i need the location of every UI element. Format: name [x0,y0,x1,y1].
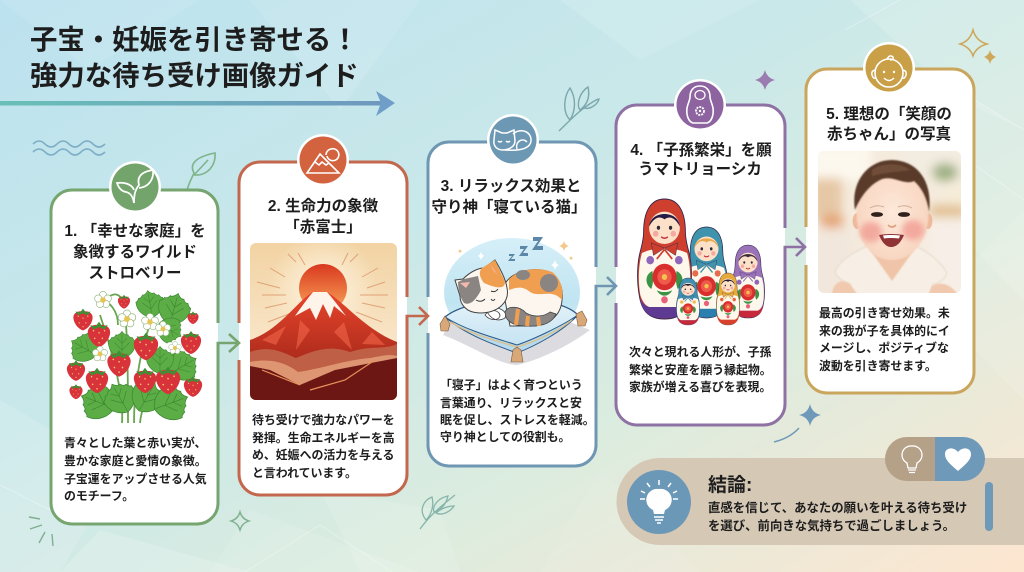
body text [64,436,207,503]
heading: 守り神「寝ている猫」 [431,197,587,216]
body text: 言葉通り、リラックスと安 [440,396,582,410]
body text [440,378,595,444]
body text: 眠を促し、ストレスを軽減。 [440,413,595,427]
icon pill: bulb and heart [885,437,985,481]
body text [819,306,950,373]
icon: doll [674,79,726,131]
body text: 青々とした葉と赤い実が、 [64,436,206,450]
body text [252,413,395,480]
icon: baby face [863,42,915,94]
arrow: title timeline [0,91,395,116]
panel: card 1 wild strawberry [51,161,218,524]
body text [708,500,967,533]
body text: め、妊娠への活力を与える [252,448,394,462]
panel: conclusion [616,458,1024,545]
heading: 3. リラックス効果と [441,177,581,195]
title [30,24,359,91]
body text: と言われています。 [252,466,357,480]
body text: 発揮。生命エネルギーを高 [252,431,395,445]
panel: card 4 matryoshka [616,79,785,425]
body text: 繁栄と安産を願う縁起物。 [629,363,772,377]
body text: 豊かな家庭と愛情の象徴。 [64,454,207,468]
photo: baby [818,151,961,293]
heading [268,196,379,236]
arrow: 4 to 5 [784,238,805,256]
title: 強力な待ち受け画像ガイド [30,60,359,91]
illustration: Fuji [250,233,397,400]
heading: 「赤富士」 [284,218,362,236]
illustration: strawberries [64,288,204,426]
heading [826,105,952,143]
heading: ストロベリー [88,265,182,282]
heading: 1. 「幸せな家庭」を [64,221,206,240]
body text: 「寝子」はよく育つという [440,378,583,392]
arrow: 2 to 3 [406,307,428,325]
panel: card 5 smiling baby [806,42,974,393]
arrow: 3 to 4 [594,277,616,295]
heading: 象徴するワイルド [73,242,197,261]
icon: sprout [109,161,161,213]
decoration: leaves branch [559,87,599,131]
body text: を選び、前向きな気持ちで過ごしましょう。 [708,518,955,533]
icon: light bulb [627,470,691,534]
heading [64,221,206,282]
panel: card 2 red Fuji [239,134,407,495]
body text: 最高の引き寄せ効果。未 [819,306,950,320]
body text [629,345,772,394]
heading: 結論: [708,474,752,496]
heading: 赤ちゃん」の写真 [827,125,951,143]
body text: メージし、ポジティブな [819,341,949,355]
heading [431,177,587,216]
heading: 5. 理想の「笑顔の [826,105,952,123]
body text: 波動を引き寄せます。 [819,359,937,373]
body text: 来の我が子を具体的にイ [819,324,950,338]
arrow: 1 to 2 [216,334,239,352]
body text: のモチーフ。 [64,489,134,503]
body text: 直感を信じて、あなたの願いを叶える待ち受け [708,500,967,515]
heading: 4. 「子孫繁栄」を願 [630,140,772,159]
body text: 家族が増える喜びを表現。 [629,380,771,394]
heading: 2. 生命力の象徴 [268,196,379,215]
accent bar [985,482,993,531]
illustration: cat [440,237,590,365]
body text: 待ち受けで強力なパワーを [252,413,395,427]
icon: cat [487,114,539,166]
decoration: waves [33,141,105,155]
body text: 子宝運をアップさせる人気 [64,472,207,486]
body text: 次々と現れる人形が、子孫 [629,345,772,359]
icon: mountain [297,134,349,186]
body text: 守り神としての役割も。 [440,430,570,444]
illustration: matryoshka dolls [638,199,765,325]
panel: card 3 sleeping cat [428,114,596,466]
heading [630,140,772,178]
title: 子宝・妊娠を引き寄せる！ [30,24,359,55]
decoration: leaf [187,153,215,190]
heading: うマトリョーシカ [638,160,762,178]
